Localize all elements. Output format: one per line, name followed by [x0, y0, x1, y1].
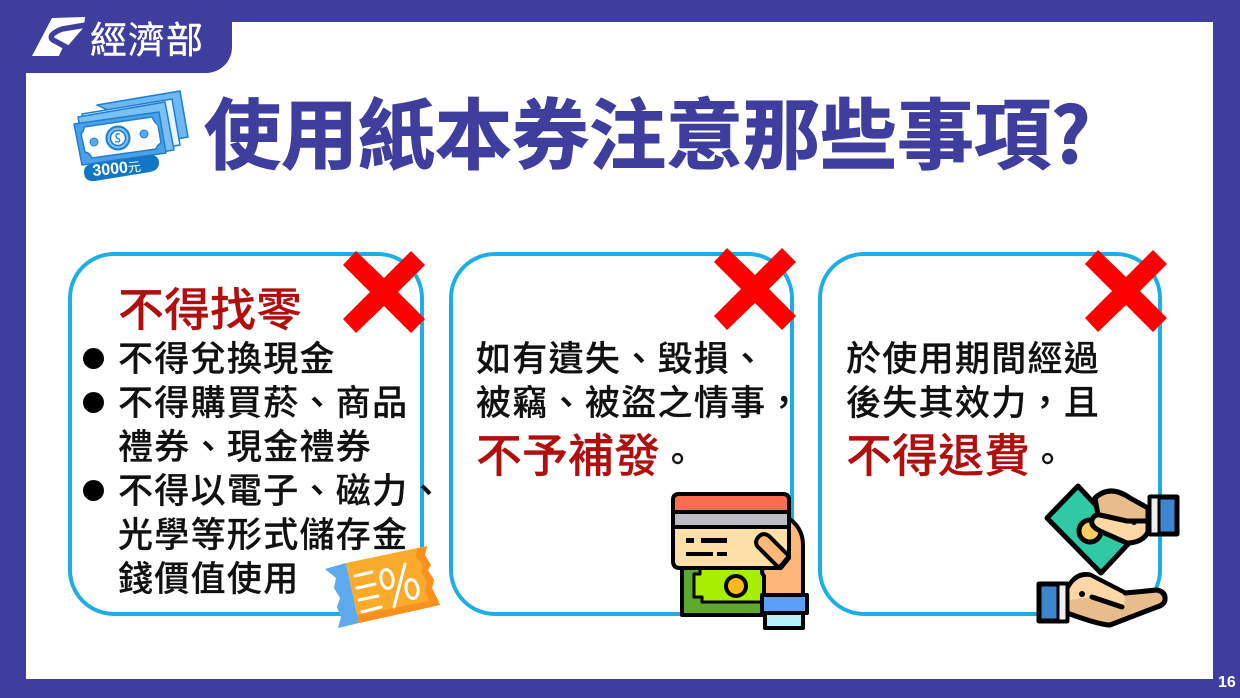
- logo text: 經濟部: [90, 10, 204, 64]
- icon: banknotes 3000: [73, 90, 189, 182]
- icon: card and cash in hand: [671, 492, 809, 630]
- panel 3 text: [846, 331, 1100, 426]
- panel 3 emphasis: 不得退費。: [846, 420, 1066, 486]
- panel 3 text: 後失其效力，且: [846, 375, 1100, 426]
- icon: banknotes 3000: 3000元: [91, 156, 142, 180]
- panel 2 text: 被竊、被盜之情事，: [476, 375, 803, 426]
- bullet list: 不得購買菸、商品: [118, 375, 408, 426]
- bullet list: 光學等形式儲存金: [118, 507, 408, 558]
- icon: discount coupon: [325, 546, 440, 628]
- panel 2 text: 如有遺失、毀損、: [476, 331, 766, 382]
- icon: hands exchanging money: [1036, 484, 1180, 628]
- icon: ministry logo: [32, 17, 85, 56]
- icon: red cross 3: [1085, 250, 1167, 332]
- bullet list: [83, 331, 445, 602]
- bullet list: 不得兌換現金: [118, 331, 336, 382]
- header tab with logo: [0, 0, 232, 73]
- icon: red cross 1: [343, 251, 425, 333]
- panel: no change: [68, 252, 424, 616]
- title: 使用紙本券注意那些事項?: [204, 75, 1091, 186]
- icon: red cross 2: [714, 248, 796, 330]
- panel 1 heading: 不得找零: [118, 274, 302, 340]
- panel 2 text: [476, 331, 803, 426]
- bullet list: 禮券、現金禮券: [118, 419, 372, 470]
- panel 2 emphasis: 不予補發。: [476, 420, 696, 486]
- panel: no refund: [818, 252, 1162, 616]
- panel: lost or damaged: [449, 252, 794, 616]
- bullet list: 不得以電子、磁力、: [118, 463, 445, 514]
- page number: 16: [1218, 674, 1236, 691]
- panel 3 text: 於使用期間經過: [846, 331, 1100, 382]
- bullet list: 錢價值使用: [118, 551, 300, 602]
